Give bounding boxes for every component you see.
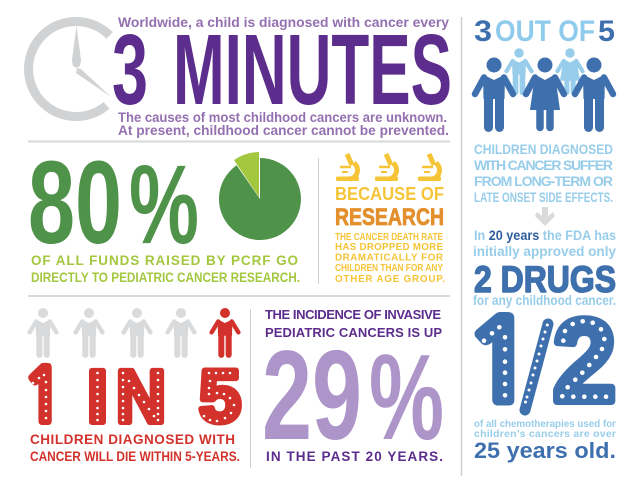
- stat: 29 percent: 29: [262, 324, 362, 466]
- heading: 3 minutes: 3: [112, 14, 148, 126]
- icon: five people, three dark: [475, 48, 613, 128]
- heading: because of: BECAUSE OF: [335, 183, 444, 204]
- text: research detail: [335, 232, 445, 285]
- text: research detail: DRAMATICALLY FOR: [335, 252, 443, 264]
- text: FDA: [473, 228, 616, 259]
- text: 1 in 5 caption: [30, 432, 240, 464]
- panel: 29 percent incidence: [262, 307, 444, 466]
- stat: one half: [463, 295, 616, 426]
- heading: 3 minutes: MINUTES: [173, 14, 452, 126]
- text: past 20 years: IN THE PAST 20 YEARS.: [266, 449, 443, 464]
- text: chemotherapies: [474, 418, 616, 440]
- chart: pie 80 percent: [219, 152, 301, 240]
- text: funds caption: [31, 253, 300, 285]
- text: side effects: [474, 141, 613, 205]
- text: incidence intro: THE INCIDENCE OF INVASIVE: [265, 307, 441, 322]
- heading: 3 out of 5: 3: [474, 15, 492, 48]
- heading: research: RESEARCH: [335, 204, 444, 231]
- text: FDA: In 20 years the FDA has: [474, 228, 616, 243]
- panel: right column: [463, 15, 616, 463]
- text: 1 in 5 caption: CANCER WILL DIE WITHIN 5-YEARS.: [30, 449, 240, 464]
- text: research detail: CHILDREN THAN FOR ANY: [335, 263, 443, 274]
- icon: down arrow: [535, 207, 555, 226]
- stat: 1 in 5: 5: [199, 355, 241, 438]
- panel: because of research: [335, 154, 445, 285]
- stat: 80 percent: %: [129, 142, 199, 267]
- panel: 1 in 5: [22, 308, 241, 464]
- stat: 1 in 5: [22, 355, 241, 438]
- stat: 1 in 5: 1: [22, 361, 65, 434]
- text: 1 in 5 caption: CHILDREN DIAGNOSED WITH: [30, 432, 235, 447]
- text: funds caption: OF ALL FUNDS RAISED BY PCRF GO: [31, 253, 298, 268]
- text: causes unknown: At present, childhood cancer cannot be prevented.: [118, 122, 449, 138]
- text: incidence intro: PEDIATRIC CANCERS IS UP: [265, 325, 442, 340]
- headline: worldwide every 3 minutes: [112, 14, 452, 138]
- text: worldwide intro: Worldwide, a child is diagnosed with cancer every: [118, 14, 449, 30]
- text: FDA: initially approved only: [473, 244, 616, 259]
- heading: 3 minutes: [112, 14, 452, 126]
- text: funds caption: DIRECTLY TO PEDIATRIC CANCER RESEARCH.: [31, 270, 300, 285]
- text: chemotherapies: of all chemotherapies used for: [474, 418, 616, 430]
- heading: 3 out of 5: 5: [598, 15, 615, 48]
- stat: one half: 2: [553, 295, 616, 426]
- stat: 25 years old: 25 years old.: [474, 438, 616, 463]
- heading: 3 out of 5: OUT OF: [495, 15, 595, 48]
- text: chemotherapies: children's cancers are over: [474, 428, 616, 440]
- stat: one half: 1: [463, 307, 538, 418]
- stat: 80 percent: 80: [28, 137, 122, 269]
- text: causes unknown: The causes of most childhood cancers are unknown.: [118, 109, 447, 125]
- text: research detail: HAS DROPPED MORE: [335, 242, 443, 253]
- text: incidence intro: [265, 307, 442, 340]
- text: research detail: OTHER AGE GROUP.: [335, 274, 445, 285]
- text: side effects: WITH CANCER SUFFER: [474, 157, 613, 173]
- stat: 29 percent: %: [369, 329, 444, 465]
- stat: 2 drugs: 2 DRUGS: [474, 259, 616, 300]
- text: any childhood cancer: for any childhood cancer.: [473, 293, 616, 308]
- text: causes unknown: [118, 109, 449, 138]
- icon: row of people, one red: [30, 308, 238, 355]
- text: side effects: FROM LONG-TERM OR: [474, 173, 613, 189]
- icon: clock: [29, 21, 111, 116]
- panel: 80 percent of funds: [28, 137, 301, 285]
- text: side effects: CHILDREN DIAGNOSED: [474, 141, 613, 157]
- text: research detail: THE CANCER DEATH RATE: [335, 232, 443, 243]
- icon: microscopes: [336, 154, 441, 181]
- stat: 1 in 5: N: [116, 355, 166, 438]
- stat: 1 in 5: I: [87, 355, 108, 438]
